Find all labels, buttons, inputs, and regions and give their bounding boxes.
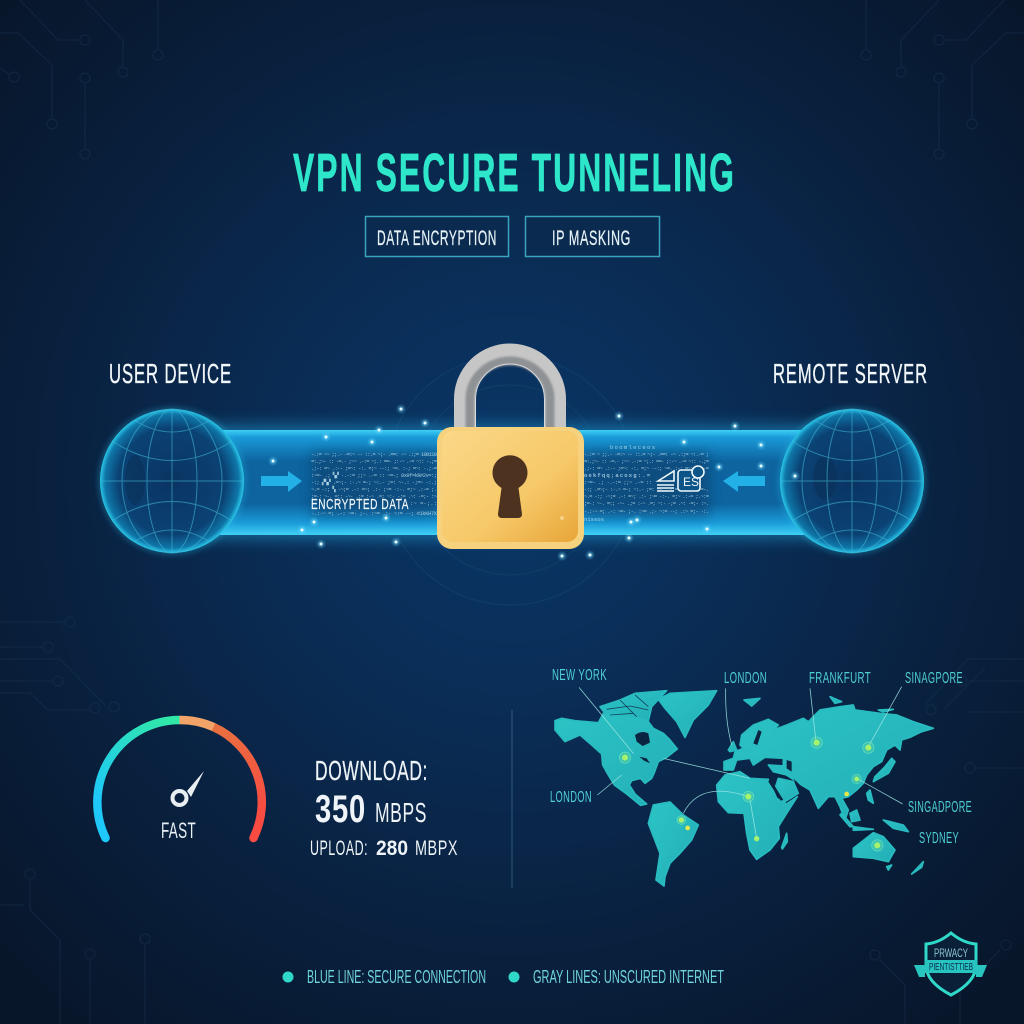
connection lines [579, 687, 903, 838]
privacy badge: PRWACY [934, 946, 968, 960]
encrypted data stream: left: :~ =-;.: [410, 500, 437, 507]
speed readout: UPLOAD: [310, 837, 368, 860]
encrypted data stream: right [584, 444, 709, 523]
map labels: LONDON [724, 670, 767, 687]
encrypted data stream: left [311, 451, 438, 517]
speed readout: MBPS [375, 797, 427, 828]
encrypted data stream: left: -:; ▞▚▞ .=~;- :·.~ =-; ~:.- ;=: ~-.: ·;=~ -:.; [311, 478, 437, 486]
map labels: LONDON [550, 789, 592, 806]
speed readout: DOWNLOAD: [315, 755, 428, 786]
lock body [437, 427, 584, 549]
legend: blue line [282, 967, 486, 987]
encrypted tunnel [170, 426, 850, 538]
encrypted data stream: right: =:.;~- :: -=.· ;~~ .-:= ~;.: ==- ;:·~ .-= ~:: -.;= [584, 458, 709, 465]
speed readout: MBPX [415, 837, 458, 860]
divider [512, 710, 513, 888]
keyhole [492, 455, 528, 518]
privacy badge: PIENTISTTIEB [929, 962, 973, 973]
encrypted data stream: right: -.:= ~ ;;.- ·=:~ -- ::.= ~;- .==: -~ .:;= ~:.-= ; [584, 451, 709, 458]
globe: user device [98, 407, 246, 555]
encrypted data stream: left: .;-: =~ .:·- ;=~: -:. =;~ ·-:; ~=. :-; =~: ·.;-= [311, 465, 437, 472]
lock halo rings [385, 355, 635, 605]
map labels: NEW YORK [552, 667, 607, 684]
encrypted data stream: left: ~.= -:; ▚ ·~;= .-: =~; .:- ;~= ·:-. =;~ .:-= ;. [311, 485, 437, 493]
encrypted data stream: left: -.:= ~~ ;;.- ·=:~ -- ::.= ~;- .==: -~ .:;= 100110 [311, 451, 437, 458]
encrypted data stream: right: ~.= -:; ·~;= .-: =~; .:- ;~= ·:-. =;~ .:-= ;.~:= [584, 493, 709, 500]
sparkles [270, 406, 798, 560]
arctic channels [607, 695, 648, 717]
tag: IP masking [526, 216, 660, 256]
arrow: left to right [261, 471, 302, 492]
speed readout: 280 [376, 837, 408, 860]
legend: gray lines [508, 967, 724, 987]
shackle [464, 354, 556, 432]
privacy badge [914, 933, 987, 995]
map labels: SYDNEY [919, 830, 959, 847]
encrypted data stream: right: -.:·~ =; .-: ~=· ;-. :~= .;- ~:= ·-; .:~ =;- ·:. [584, 508, 709, 515]
speed readout: 350 [315, 788, 366, 831]
gauge label: FAST [161, 818, 196, 843]
globe: remote server [778, 407, 926, 555]
icon: data glyphs: ES [683, 475, 699, 489]
map labels: FRANKFURT [809, 670, 871, 687]
encrypted data stream: left: ;=·: ~-. =:; -~· .;= :-~ .=; ~:· -;= .~: ·=;- :~ [311, 493, 438, 500]
encrypted data stream: right: -:; .=~;- :·.~ =-; ~:.- ;=: ~-.: ·;=~ -:.; ~:=-. [584, 486, 709, 493]
tag: IP masking: IP MASKING [552, 227, 631, 250]
map labels: SINGADPORE [908, 799, 972, 816]
encrypted data stream: right: ;=·: ~-. =:; -~· .;= :-~ .=; ~:· -;= .~: ·=;- :~. [584, 500, 709, 507]
encrypted data stream: left: -.:·~ =; .-: ~=· ;-. :~= .;- ~:= ·-; #1kKH7X [311, 510, 438, 517]
legend: blue line: BLUE LINE: SECURE CONNECTION [307, 967, 486, 987]
world map [550, 667, 972, 886]
encrypted data stream: right: nissos [584, 516, 604, 523]
arrow: right to left [723, 471, 765, 492]
server location dots [619, 737, 883, 851]
speed gauge [97, 720, 262, 843]
encrypted data stream: right: boomleceos [610, 444, 655, 451]
encrypted data stream: left: =:.;~- :: -=.· ;~~ .-:= ~;.: ==- ;:·~ .-= ~:: -.;= [311, 458, 437, 465]
lakes and inland seas [635, 730, 802, 801]
map labels [550, 667, 972, 847]
title: VPN SECURE TUNNELING [293, 143, 736, 203]
tag: data encryption [366, 216, 508, 256]
legend: gray lines: GRAY LINES: UNSCURED INTERNET [533, 967, 724, 987]
continents [555, 691, 933, 886]
gauge needle [172, 771, 204, 805]
padlock [437, 354, 584, 549]
tag: data encryption: DATA ENCRYPTION [377, 227, 497, 250]
encrypted data stream: left: :~=- .; ▚▞ ·.-:= ;;~ .-= :: ~=-; 0x9f=kR#2v=:; [311, 471, 437, 479]
encrypted data stream: right: .;-: =~ .:·- ;=~: -:. =;~ ·-:; ~=. :-; =~: ·.;-= [584, 465, 709, 472]
map labels: SINAGPORE [905, 670, 963, 687]
gauge arc [97, 720, 262, 838]
speed readout [310, 755, 458, 860]
encrypted data stream: right: oekfqq;acoxg:.= [584, 472, 651, 479]
encrypted data stream: right: :~=- .; ·.-:= ;;~ .-= :: [584, 479, 652, 486]
text: encrypted data: ENCRYPTED DATA [311, 496, 409, 513]
label: user device: USER DEVICE [109, 358, 232, 389]
